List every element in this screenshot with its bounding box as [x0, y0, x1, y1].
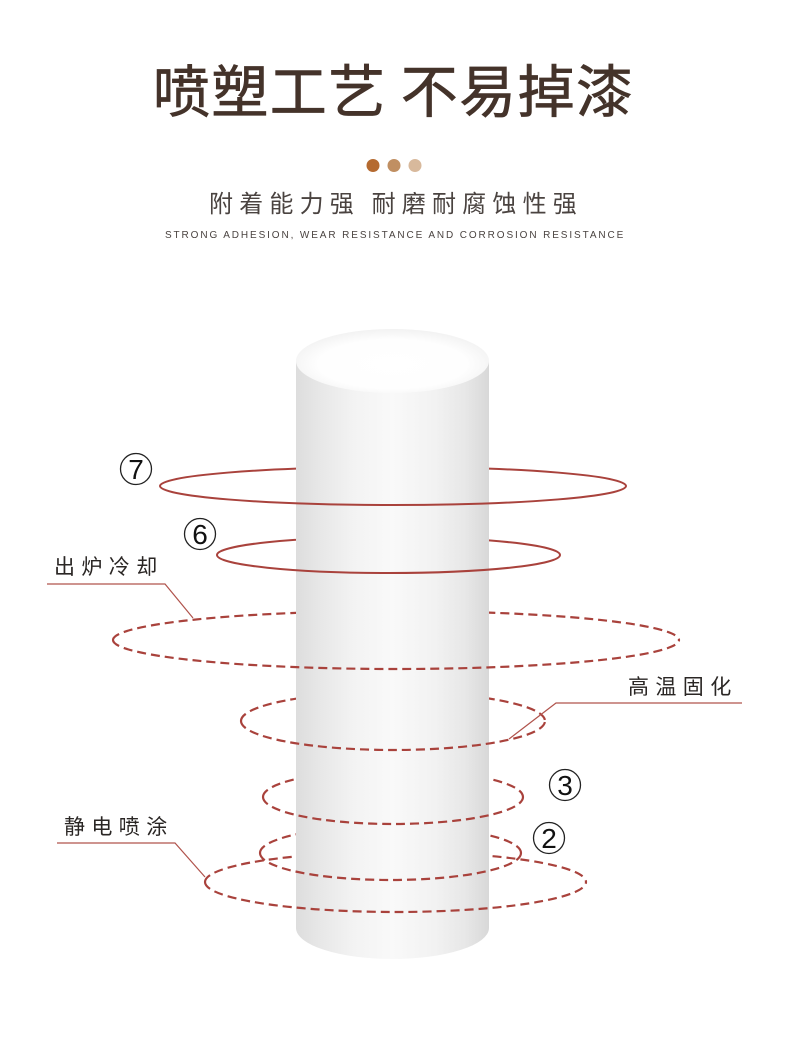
callout: electrostatic spraying: 静电喷涂	[64, 811, 174, 841]
ring: curing dashed	[241, 692, 545, 750]
callout: curing: 高温固化	[628, 671, 738, 701]
number 7: 7	[128, 454, 144, 485]
ring 6	[217, 537, 560, 573]
callout: electrostatic spraying	[57, 811, 205, 877]
ring 3 dashed	[262, 778, 524, 826]
subtitle: 附着能力强 耐磨耐腐蚀性强	[209, 184, 583, 219]
ring: spraying dashed	[205, 852, 586, 912]
ring: cooling dashed	[113, 611, 679, 669]
number 3	[550, 770, 580, 801]
callout: cooling: 出炉冷却	[54, 551, 164, 581]
callout: cooling	[47, 551, 193, 618]
cylinder	[296, 329, 489, 959]
number 7	[120, 454, 152, 485]
number 6: 6	[192, 519, 208, 550]
number 3: 3	[557, 770, 573, 801]
english subtitle: STRONG ADHESION, WEAR RESISTANCE AND CORROSION RESISTANCE	[165, 230, 625, 241]
number 2	[534, 822, 564, 854]
ring 7	[160, 467, 626, 505]
callout: curing	[509, 671, 742, 739]
number 2: 2	[541, 823, 557, 854]
number 6	[184, 518, 216, 550]
title: 喷塑工艺 不易掉漆	[153, 47, 634, 129]
decorative dots	[366, 159, 422, 172]
ring 2 dashed	[260, 826, 521, 880]
